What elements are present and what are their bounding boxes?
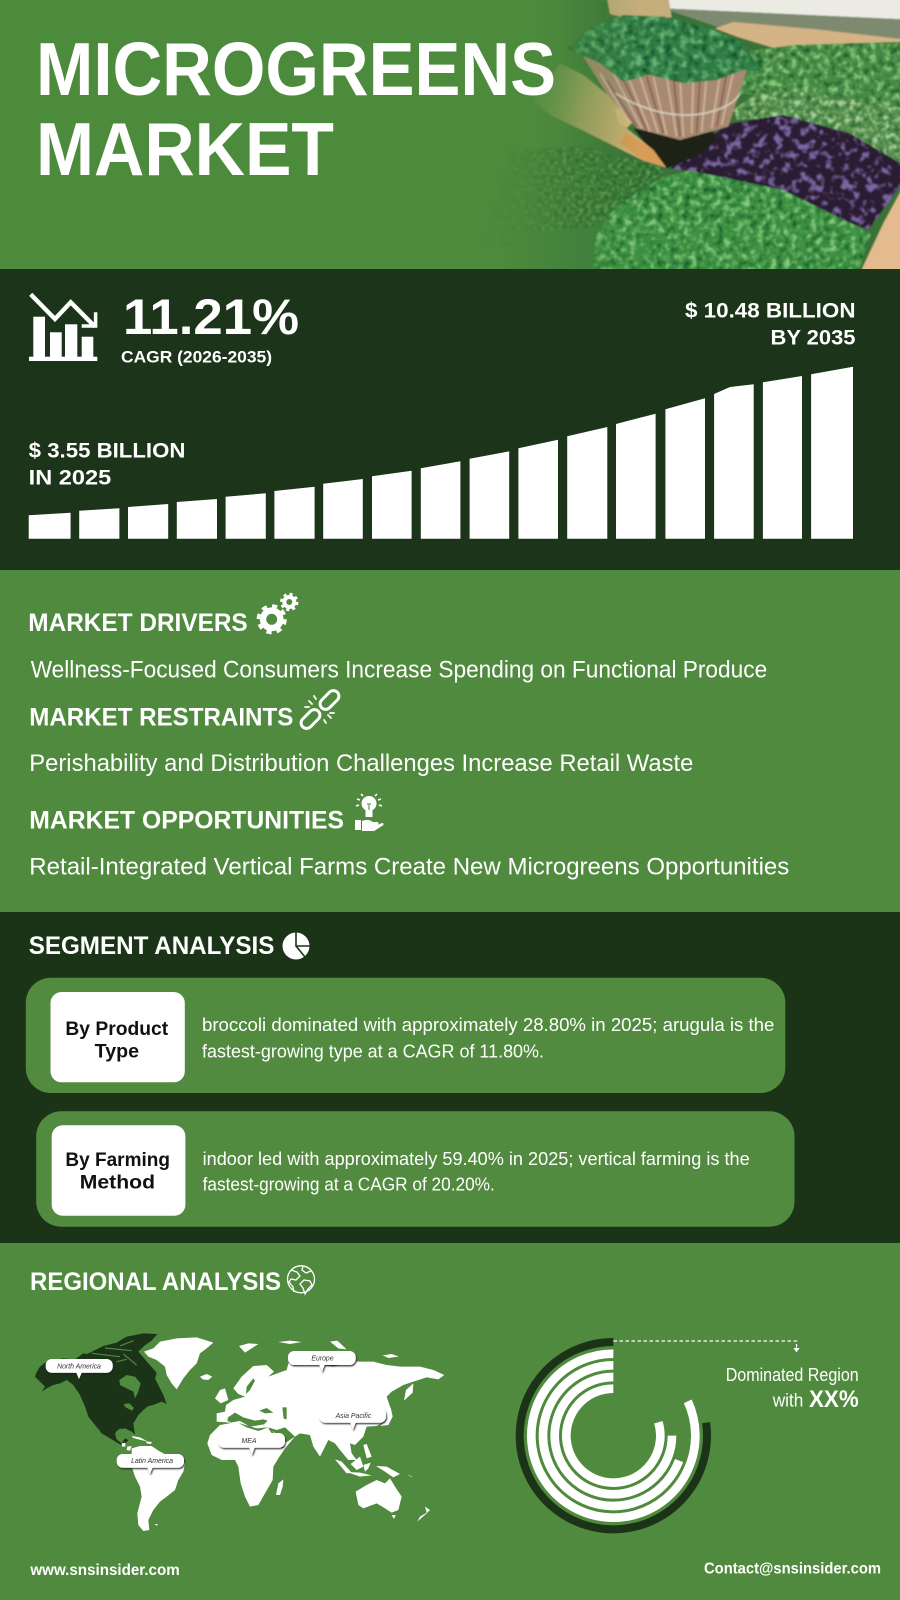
label: by product type [50,992,185,1082]
heading: market drivers: MARKET DRIVERS [28,609,248,637]
text: farming method: fastest-growing at a CAGR of 20.20%. [203,1175,495,1195]
callout: dominated region: XX% [809,1386,859,1413]
heading: market restraints: MARKET RESTRAINTS [29,704,293,732]
radial bar chart [520,1342,707,1529]
icon: globe [288,1266,314,1294]
base value: $ 3.55 BILLION [29,439,185,463]
heading: market opportunities: MARKET OPPORTUNITIES [29,807,344,835]
callout: europe: Europe [311,1356,334,1362]
CAGR value: 11.21% [123,289,299,345]
callout: europe [288,1351,356,1372]
text: market drivers: Wellness-Focused Consumers Increase Spending on Functional Produce [31,656,767,683]
icon: gears [258,594,297,633]
text: farming method: indoor led with approximately 59.40% in 2025; vertical farming is the [203,1149,750,1169]
callout: asia pacific [319,1408,386,1430]
callout: dominated region [726,1365,859,1413]
title: MARKET [36,107,334,191]
map: eurasia, africa and oceania [207,1341,444,1522]
callout: mea [218,1433,285,1455]
heading: segment analysis: SEGMENT ANALYSIS [29,932,274,960]
panel: market size band [0,269,900,570]
base value [29,439,185,489]
card: by farming method [36,1111,794,1227]
label: by product type: By Product [65,1018,169,1040]
text: market restraints: Perishability and Distribution Challenges Increase Retail Waste [29,750,693,777]
heading: market drivers [28,594,297,637]
header panel [0,0,900,277]
callout: asia pacific: Asia Pacific [335,1413,372,1420]
text: product type: fastest-growing type at a CAGR of 11.80%. [202,1041,544,1061]
base value: IN 2025 [29,465,111,489]
label: by farming method [52,1125,185,1216]
title: MICROGREENS [36,27,556,111]
icon: chart with arrow [29,294,97,361]
forecast value: $ 10.48 BILLION [685,298,856,322]
title [36,27,556,191]
label: by farming method: By Farming [65,1149,170,1171]
icon: pie chart [282,932,310,960]
heading: market opportunities [29,794,384,835]
footer [29,1560,881,1579]
footer: Contact@snsinsider.com [704,1560,881,1577]
footer: www.snsinsider.com [29,1562,180,1579]
text: market opportunities: Retail-Integrated Vertical Farms Create New Microgreens Opportunities [29,853,789,880]
callout: north america [46,1359,113,1379]
heading: market restraints [29,688,341,732]
panel: segment analysis [0,912,900,1243]
label: by product type: Type [95,1041,139,1063]
heading: regional analysis: REGIONAL ANALYSIS [30,1268,281,1296]
icon: broken link [299,688,341,731]
forecast value [685,298,856,350]
CAGR value [121,289,299,366]
callout: latin america: Latin America [131,1458,173,1465]
text: farming method [203,1149,750,1195]
text: product type [202,1015,774,1061]
bar chart: market growth [29,367,853,539]
label: by farming method: Method [80,1171,155,1193]
panel: market dynamics [28,594,789,880]
callout: latin america [117,1454,184,1474]
card: by product type [26,978,785,1093]
icon: idea in hand [355,794,384,831]
world map [35,1333,444,1531]
callout: mea: MEA [242,1438,257,1445]
text: product type: broccoli dominated with approximately 28.80% in 2025; arugula is the [202,1015,774,1035]
callout: north america: North America [57,1364,101,1370]
header photo: microgreens trays [531,0,900,269]
callout: dominated region: Dominated Region [726,1365,859,1385]
forecast value: BY 2035 [770,326,856,350]
callout: dominated region: with [772,1391,803,1411]
CAGR value: CAGR (2026-2035) [121,348,272,366]
map: americas and greenland [35,1333,213,1531]
arrow: dashed leader line [614,1341,800,1352]
photo fade into green [484,0,628,269]
